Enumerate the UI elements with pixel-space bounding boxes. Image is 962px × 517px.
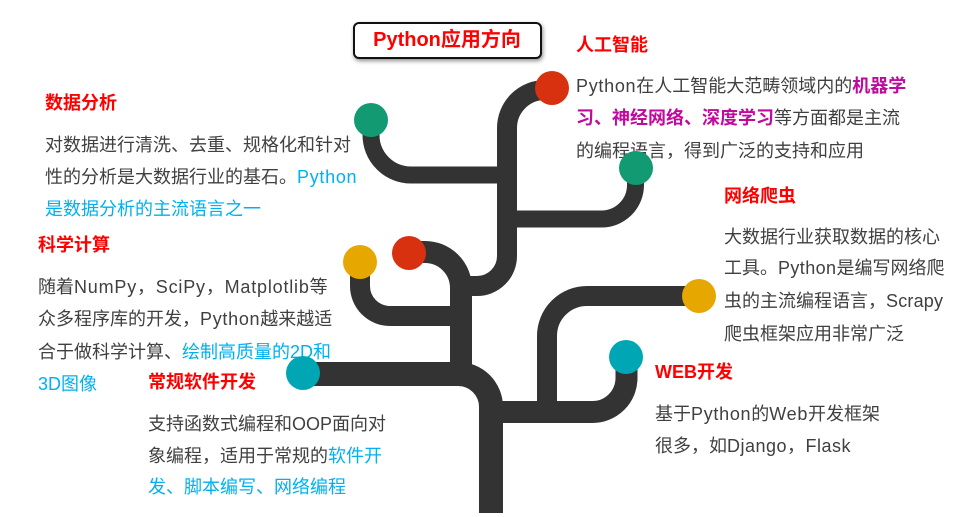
text block: WEB开发: 基于Python的Web开发框架 <box>655 404 880 424</box>
text block: WEB开发 <box>655 362 880 456</box>
text block: 数据分析 <box>45 93 357 219</box>
text block: 常规软件开发: 支持函数式编程和OOP面向对 <box>148 414 386 434</box>
text block: 网络爬虫: 大数据行业获取数据的核心 <box>724 227 940 247</box>
text block: 常规软件开发: 象编程，适用于常规的软件开 <box>148 446 382 466</box>
text block: 科学计算: 科学计算 <box>38 235 110 255</box>
text block: 常规软件开发: 发、脚本编写、网络编程 <box>148 477 346 497</box>
text block: 常规软件开发 <box>148 372 386 497</box>
text block: 人工智能: 的编程语言，得到广泛的支持和应用 <box>576 141 864 161</box>
text block: WEB开发: 很多，如Django，Flask <box>655 436 851 456</box>
text block: 科学计算: 3D图像 <box>38 374 97 394</box>
text block: 数据分析: 是数据分析的主流语言之一 <box>45 199 261 219</box>
title: Python应用方向 <box>373 29 521 51</box>
text block: 人工智能 <box>576 35 906 161</box>
text block: 人工智能: 习、神经网络、深度学习等方面都是主流 <box>576 108 900 128</box>
text block: 网络爬虫: 工具。Python是编写网络爬 <box>724 258 944 278</box>
text block: 网络爬虫: 网络爬虫 <box>724 186 796 206</box>
text block: 数据分析: 数据分析 <box>45 93 117 113</box>
text block: WEB开发: WEB开发 <box>655 362 733 382</box>
title <box>353 22 542 59</box>
text block: 常规软件开发: 常规软件开发 <box>148 372 256 392</box>
text block: 数据分析: 性的分析是大数据行业的基石。Python <box>45 167 357 187</box>
text block: 科学计算 <box>38 235 332 394</box>
tree branches <box>303 90 699 513</box>
nodes <box>286 71 716 390</box>
text block: 人工智能: Python在人工智能大范畴领域内的机器学 <box>576 76 906 96</box>
text block: 科学计算: 众多程序库的开发，Python越来越适 <box>38 309 332 329</box>
text block: 网络爬虫: 爬虫框架应用非常广泛 <box>724 324 904 344</box>
text block: 网络爬虫 <box>724 186 944 344</box>
text block: 科学计算: 随着NumPy，SciPy，Matplotlib等 <box>38 277 328 297</box>
text block: 人工智能: 人工智能 <box>576 35 648 55</box>
text block: 科学计算: 合于做科学计算、绘制高质量的2D和 <box>38 342 331 362</box>
text block: 网络爬虫: 虫的主流编程语言，Scrapy <box>724 291 943 311</box>
text block: 数据分析: 对数据进行清洗、去重、规格化和针对 <box>45 135 351 155</box>
